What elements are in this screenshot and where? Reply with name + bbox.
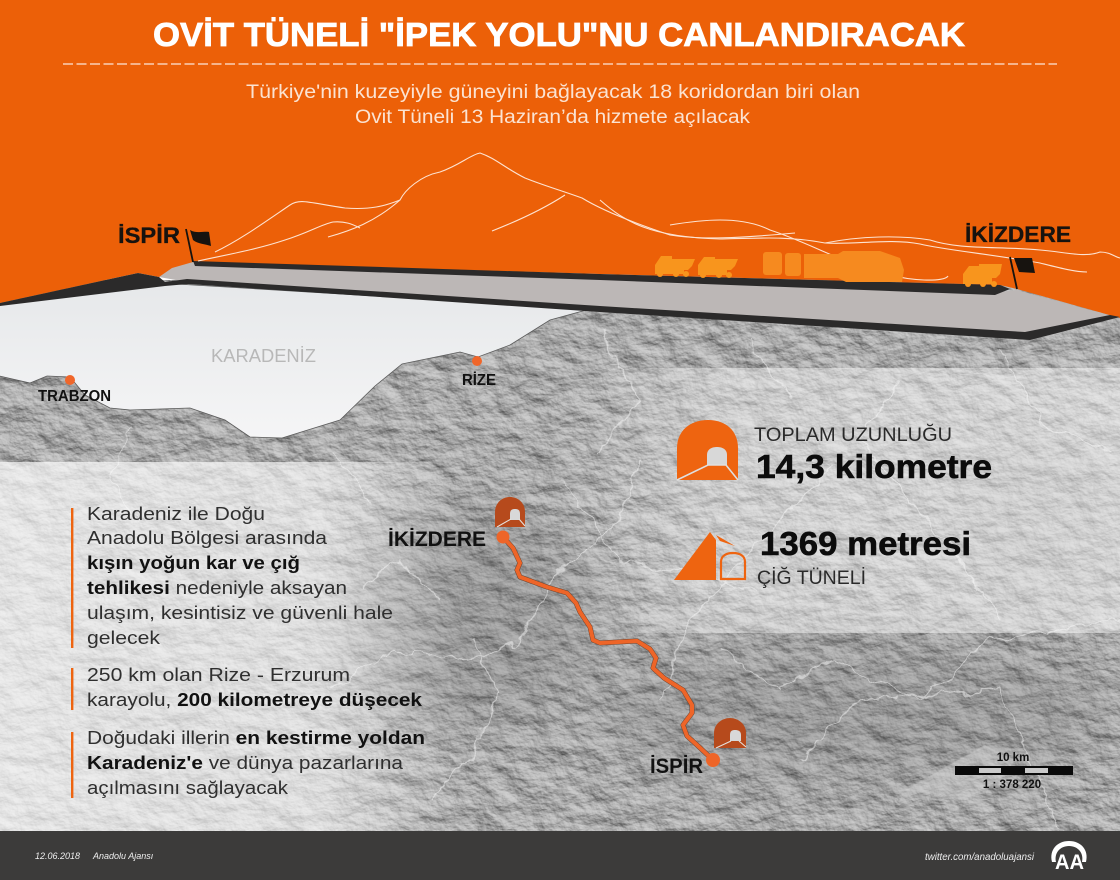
text block: distance xyxy=(71,665,423,710)
route line xyxy=(503,537,713,760)
city: Trabzon: TRABZON xyxy=(38,388,111,405)
subtitle: Türkiye'nin kuzeyiyle güneyini bağlayacak 18 koridordan biri olan xyxy=(246,82,860,103)
footer bar xyxy=(0,831,1120,880)
sea label: KARADENİZ xyxy=(211,346,316,366)
route end: İspir xyxy=(650,718,746,778)
map scale bar xyxy=(955,752,1073,791)
translucent text panel left xyxy=(0,462,460,831)
translucent stats panel right xyxy=(560,368,1120,633)
stat: total length xyxy=(677,420,992,485)
small tunnel icon south xyxy=(714,718,746,748)
text block: distance: 250 km olan Rize - Erzurum xyxy=(87,665,350,685)
route start: İkizdere: İKİZDERE xyxy=(388,528,486,551)
icon: avalanche tunnel xyxy=(674,532,745,580)
text block: winter: gelecek xyxy=(87,628,161,648)
title: OVİT TÜNELİ "İPEK YOLU"NU CANLANDIRACAK xyxy=(153,16,965,53)
route start: İkizdere xyxy=(388,497,525,551)
terrain map background xyxy=(0,280,1120,840)
map scale bar: 10 km xyxy=(997,752,1029,764)
subtitle: Ovit Tüneli 13 Haziran’da hizmete açılacak xyxy=(355,107,751,128)
icon: AA logo xyxy=(1051,841,1087,874)
small tunnel icon north xyxy=(495,497,525,527)
road edges xyxy=(0,261,1120,340)
icon: AA logo: AA xyxy=(1055,851,1084,874)
flag: İkizdere: İKİZDERE xyxy=(965,222,1071,247)
city: Rize xyxy=(462,356,496,389)
flag: İspir: İSPİR xyxy=(118,223,180,248)
stat: total length: 14,3 kilometre xyxy=(756,448,992,485)
text block: winter: kışın yoğun kar ve çığ xyxy=(87,553,300,573)
text block: winter: tehlikesi nedeniyle aksayan xyxy=(87,578,347,598)
black sea xyxy=(0,283,590,438)
tunnel boring machine xyxy=(763,251,904,282)
city: Trabzon xyxy=(38,375,111,405)
orange header xyxy=(0,0,1120,318)
truck 2 xyxy=(698,257,738,278)
text block: winter: Karadeniz ile Doğu xyxy=(87,504,265,524)
truck 3 xyxy=(963,264,1002,287)
text block: winter xyxy=(71,504,393,648)
text block: winter: ulaşım, kesintisiz ve güvenli hale xyxy=(87,603,393,623)
text block: winter: Anadolu Bölgesi arasında xyxy=(87,528,328,548)
road xyxy=(0,261,1120,340)
text block: shortest route: Doğudaki illerin en kestirme yoldan xyxy=(87,728,425,748)
route end: İspir: İSPİR xyxy=(650,755,703,778)
icon: tunnel xyxy=(677,420,738,480)
stat: total length: TOPLAM UZUNLUĞU xyxy=(754,423,952,446)
flag: İspir xyxy=(118,223,211,262)
stat: avalanche tunnel: ÇİĞ TÜNELİ xyxy=(757,566,866,589)
footer bar: 12.06.2018 xyxy=(35,851,80,861)
text block: shortest route xyxy=(71,728,425,798)
text block: distance: karayolu, 200 kilometreye düşecek xyxy=(87,690,423,710)
stat: avalanche tunnel xyxy=(674,525,971,589)
footer bar: twitter.com/anadoluajansi xyxy=(925,852,1035,863)
footer bar: Anadolu Ajansı xyxy=(92,851,154,861)
map scale bar: 1 : 378 220 xyxy=(983,779,1041,791)
city: Rize: RİZE xyxy=(462,371,496,389)
flag: İkizdere xyxy=(965,222,1071,289)
text block: shortest route: Karadeniz'e ve dünya pazarlarına xyxy=(87,753,404,773)
mountain outline xyxy=(198,153,1120,280)
subtitle xyxy=(246,82,860,128)
stat: avalanche tunnel: 1369 metresi xyxy=(760,525,971,562)
truck 1 xyxy=(655,256,695,277)
text block: shortest route: açılmasını sağlayacak xyxy=(87,778,289,798)
road surface xyxy=(159,262,1112,335)
